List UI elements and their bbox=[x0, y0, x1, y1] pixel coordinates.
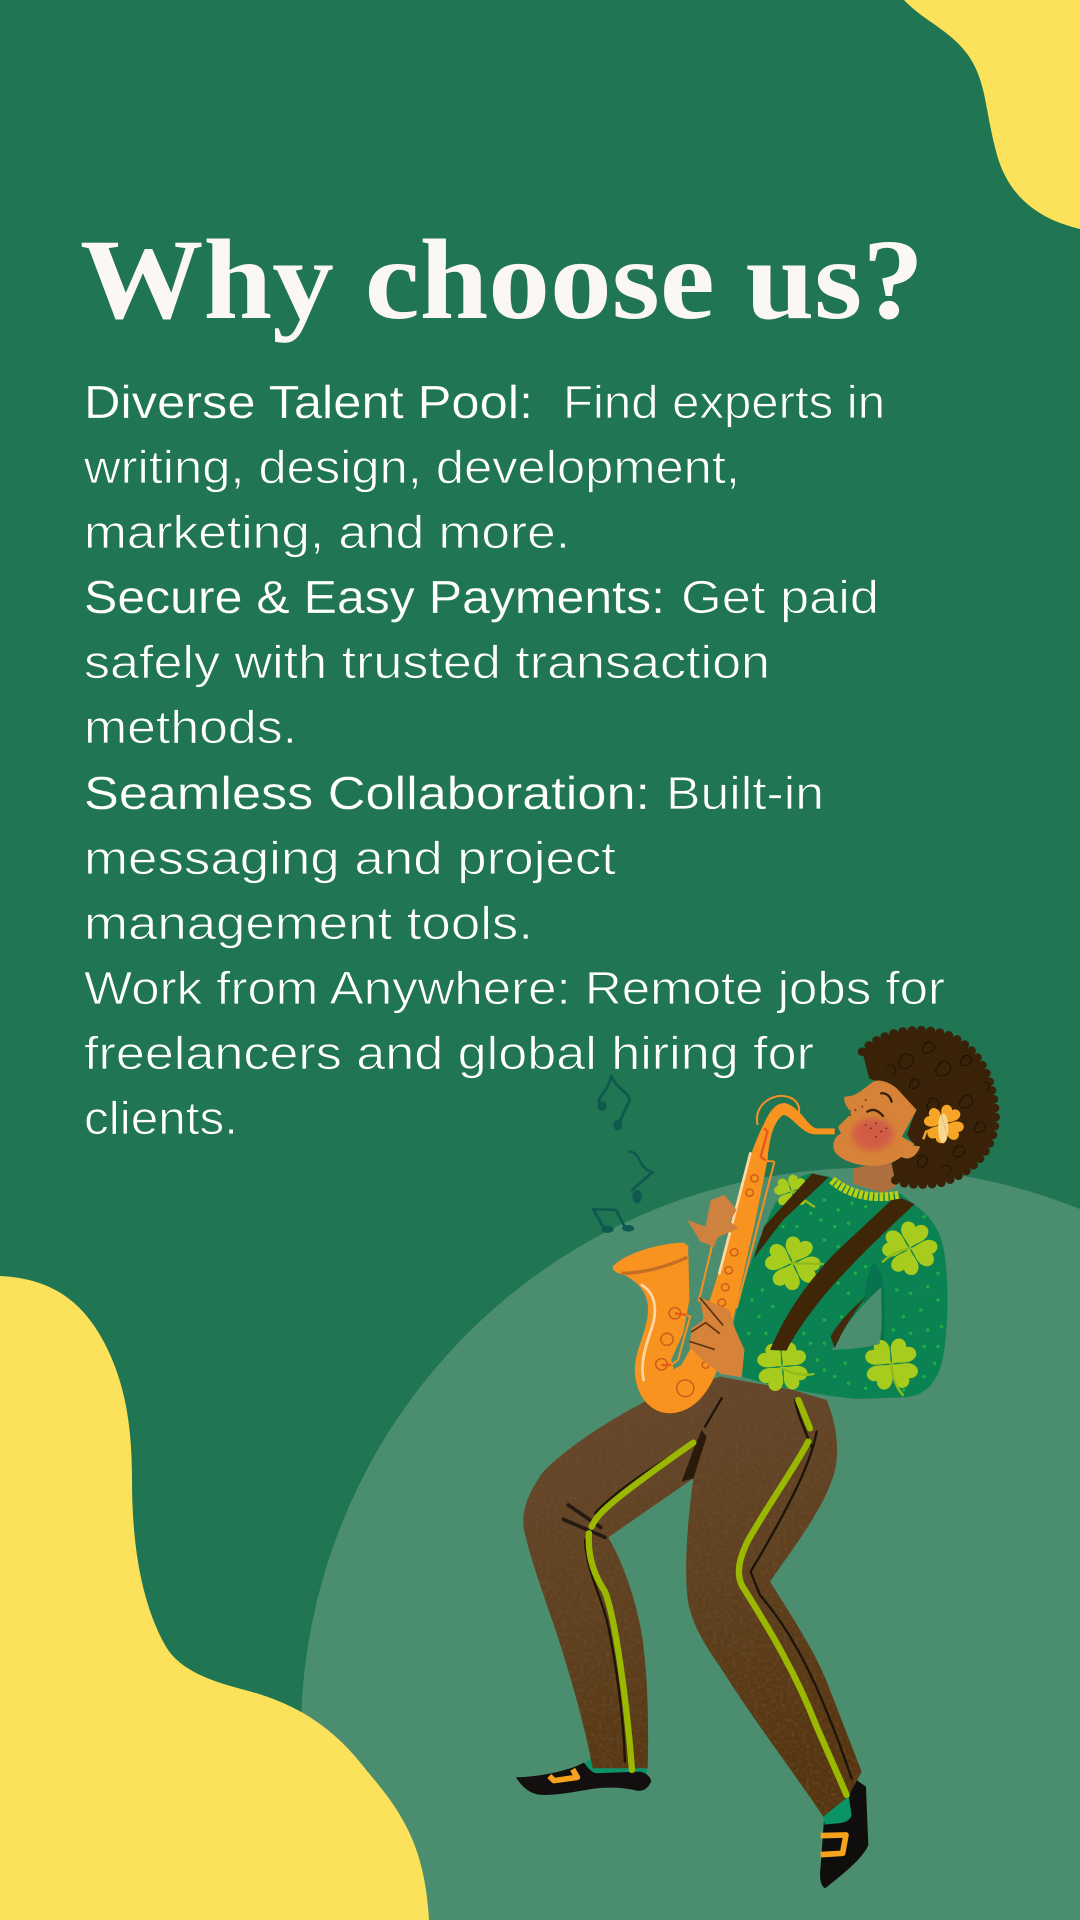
item: work from anywhere: Work from Anywhere: Remote jobs for bbox=[84, 962, 945, 1014]
sax body bbox=[625, 1103, 835, 1413]
hair flower bbox=[918, 1098, 970, 1150]
title: Why choose us? bbox=[80, 216, 924, 343]
item: seamless collaboration: messaging and project bbox=[84, 832, 616, 884]
back trouser in gap bbox=[831, 1296, 866, 1348]
item: seamless collaboration: Seamless Collaboration: bbox=[84, 767, 650, 819]
sax keys bbox=[656, 1175, 758, 1397]
item: diverse talent pool: Find experts in bbox=[563, 376, 885, 428]
item: secure payments: methods. bbox=[84, 701, 297, 753]
crotch shadow bbox=[682, 1430, 707, 1482]
lower hand bbox=[689, 1297, 744, 1377]
item: diverse talent pool: marketing, and more. bbox=[84, 506, 570, 558]
eye and brow bbox=[867, 1093, 892, 1116]
suspender right bbox=[770, 1198, 915, 1351]
left shoe bbox=[516, 1763, 651, 1795]
trouser seams dark bbox=[585, 1398, 852, 1778]
torso, head and saxophone bbox=[593, 1030, 996, 1413]
upper hand bbox=[687, 1195, 739, 1247]
sax bell rim bbox=[613, 1243, 688, 1275]
legs and shoes bbox=[516, 1377, 868, 1888]
hair outer bumps bbox=[862, 1030, 996, 1185]
trouser stripes green bbox=[589, 1400, 847, 1795]
gap between arm and body bbox=[832, 1287, 882, 1350]
right buckle bbox=[821, 1835, 846, 1855]
left sock bbox=[584, 1757, 647, 1775]
item: secure payments: safely with trusted transaction bbox=[84, 636, 770, 688]
item: seamless collaboration: management tools. bbox=[84, 897, 533, 949]
suspender left bbox=[754, 1173, 829, 1258]
item: secure payments: Get paid bbox=[681, 571, 879, 623]
trousers bbox=[523, 1377, 862, 1817]
right sock bbox=[823, 1794, 852, 1825]
hair bbox=[862, 1030, 996, 1185]
item: seamless collaboration bbox=[84, 767, 824, 949]
clovers bbox=[747, 1170, 942, 1401]
item: work from anywhere: clients. bbox=[84, 1092, 238, 1144]
blush bbox=[852, 1118, 893, 1150]
item: diverse talent pool: writing, design, development, bbox=[83, 441, 740, 493]
yellow blob bottom left bbox=[0, 1276, 429, 1920]
sax neck accent bbox=[661, 1128, 768, 1365]
sweater shadow bbox=[864, 1263, 885, 1347]
clover stems bbox=[782, 1192, 910, 1395]
neck bbox=[854, 1160, 896, 1193]
freckles bbox=[850, 1100, 886, 1137]
bell rim shading bbox=[621, 1257, 687, 1273]
right shoe bbox=[820, 1777, 868, 1888]
item: diverse talent pool: Diverse Talent Pool: bbox=[84, 376, 533, 428]
saxophone bbox=[613, 1096, 835, 1413]
hair mass bbox=[862, 1030, 996, 1185]
ear bbox=[897, 1146, 920, 1158]
sax highlight bbox=[642, 1153, 750, 1380]
face bbox=[833, 1081, 917, 1166]
item: seamless collaboration: Built-in bbox=[666, 767, 824, 819]
music notes bbox=[593, 1076, 652, 1233]
item: secure payments: Secure & Easy Payments: bbox=[84, 571, 665, 623]
item: work from anywhere: freelancers and global hiring for bbox=[84, 1027, 814, 1079]
sweater bbox=[733, 1173, 948, 1399]
finger lines bbox=[690, 1298, 723, 1349]
pale green circle bbox=[301, 1168, 1080, 1920]
item: diverse talent pool bbox=[83, 376, 885, 558]
yellow blob top right bbox=[904, 0, 1080, 229]
knee folds bbox=[563, 1505, 605, 1537]
collar bbox=[832, 1180, 898, 1197]
item: work from anywhere bbox=[84, 962, 945, 1144]
hair curls bbox=[886, 1042, 990, 1175]
body text bbox=[83, 376, 945, 1144]
left buckle bbox=[549, 1769, 577, 1781]
illustration: saxophone player bbox=[516, 1030, 996, 1888]
sax ring and rods bbox=[671, 1096, 799, 1365]
sweater dots bbox=[749, 1200, 941, 1390]
item: secure payments bbox=[84, 571, 879, 753]
